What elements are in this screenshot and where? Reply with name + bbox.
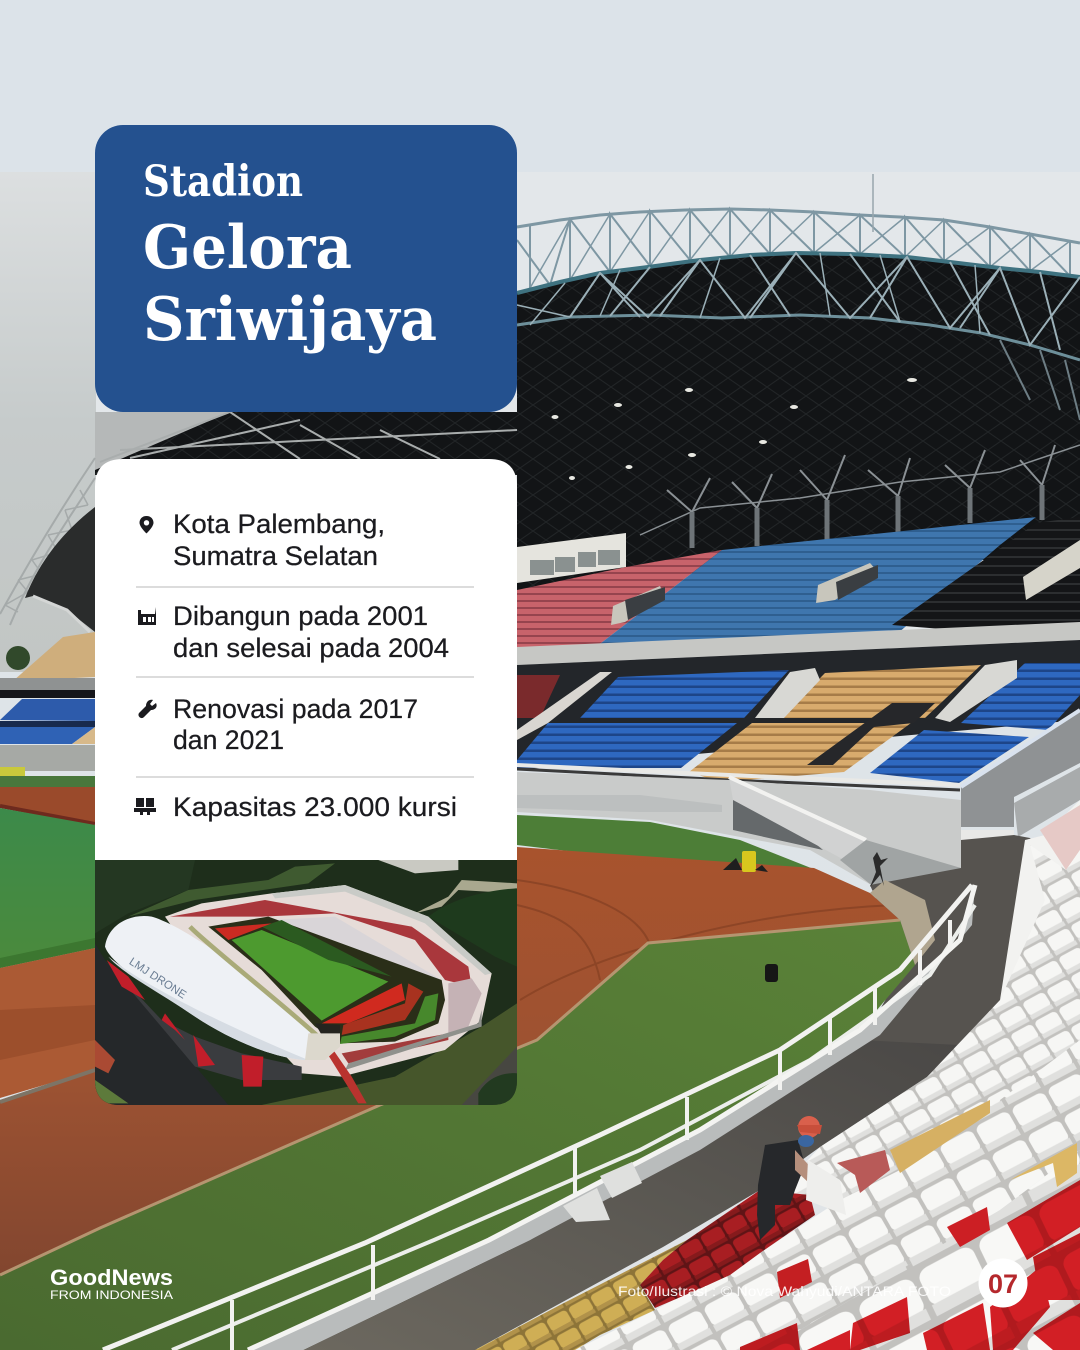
background: yellow bin and black bags [723, 851, 778, 982]
title: Sriwijaya: Sriwijaya [143, 285, 437, 355]
background: roof front truss [517, 253, 1080, 420]
title: Stadion: Stadion [143, 157, 303, 207]
background: concrete ring and dark service ground [860, 835, 1066, 1045]
background: roof support columns [640, 445, 1080, 548]
text: location: Sumatra Selatan [173, 541, 378, 571]
background: truss between the panels [100, 412, 517, 462]
background: white fence and wall [103, 885, 975, 1350]
photo: trees and ground [95, 860, 517, 1105]
background: inner grass strip [517, 815, 811, 868]
background: hazy lattice between the panels [95, 412, 230, 470]
icon: seats [134, 798, 156, 815]
logo: GoodNews from Indonesia: FROM INDONESIA [50, 1290, 173, 1302]
title: Gelora: Gelora [143, 213, 352, 283]
logo: GoodNews from Indonesia: GoodNews [50, 1265, 173, 1290]
icon: wrench [138, 700, 157, 718]
background: upper roof truss of the stadium [517, 174, 1080, 288]
background: concrete band and lower tier seats [517, 622, 1080, 790]
background: stadium seats in the foreground [475, 800, 1080, 1350]
page number badge: 07 [988, 1269, 1018, 1299]
text: renovation: dan 2021 [173, 725, 284, 755]
icon: location pin [140, 516, 154, 534]
photo credit: Foto/Ilustrasi : © Nova Wahyudi/ANTARA FOTO [618, 1283, 951, 1299]
background: roof lights [552, 378, 917, 480]
background: concrete curb [870, 880, 935, 965]
background: upper tier seats and white box [517, 517, 1080, 655]
background: concrete walkway [303, 1040, 960, 1350]
background: track edge [0, 920, 900, 1275]
background: red running track [0, 847, 900, 1275]
info panel [95, 459, 517, 862]
background: left distant stand [0, 458, 95, 1102]
page number badge [978, 1258, 1028, 1308]
background: person on walkway [870, 852, 888, 887]
text: capacity: Kapasitas 23.000 kursi [173, 792, 457, 822]
text: location: Kota Palembang, [173, 509, 385, 539]
background: dark roof underside [95, 253, 1080, 600]
background: track tyre marks [517, 880, 895, 1000]
photo: white domed roof [105, 916, 367, 1103]
icon: building construction [138, 607, 156, 625]
text: built: dan selesai pada 2004 [173, 633, 449, 663]
text: built [173, 601, 449, 663]
background: white panels on the walkway [563, 1162, 642, 1222]
photo: stands [165, 885, 492, 1077]
text: built: Dibangun pada 2001 [173, 601, 428, 631]
photo: pitch [208, 917, 445, 1044]
logo: GoodNews from Indonesia [50, 1265, 173, 1302]
title panel [95, 125, 517, 412]
background: centre field grass [0, 920, 915, 1350]
photo: white domed roof: LMJ DRONE [127, 956, 189, 1002]
background: worker painting seats [757, 1116, 846, 1240]
text: location [173, 509, 385, 571]
aerial photo of the stadium [95, 860, 517, 1105]
text: renovation [173, 694, 418, 755]
background: grey concrete walls [517, 710, 1080, 892]
text: renovation: Renovasi pada 2017 [173, 694, 418, 724]
